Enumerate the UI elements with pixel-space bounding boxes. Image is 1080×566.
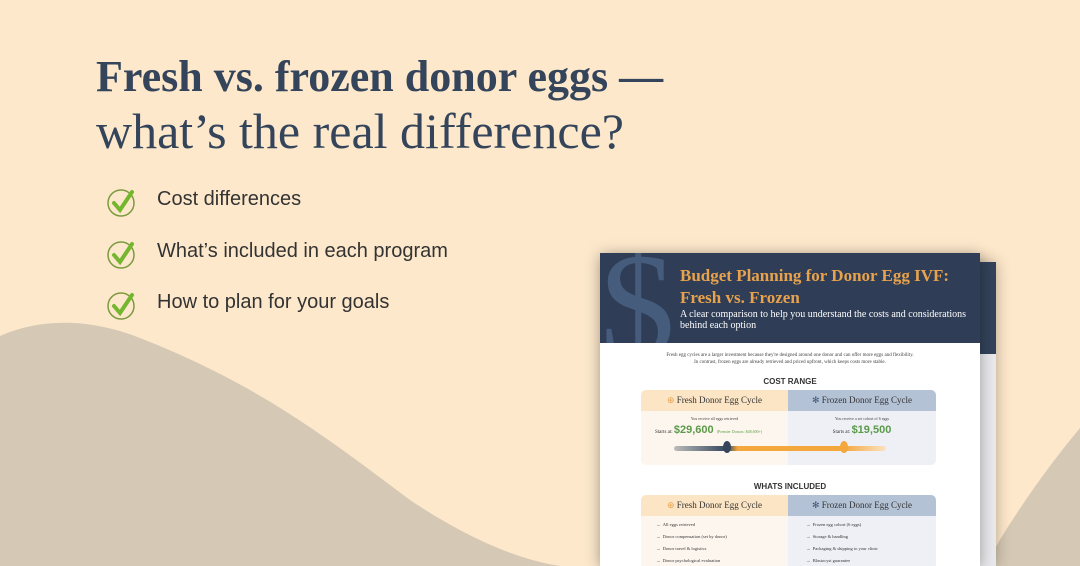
cost range panel: You receive a set cohort of 6 eggs	[835, 416, 889, 421]
cost range heading: COST RANGE	[763, 377, 817, 386]
whats included panel: → Packaging & shipping to your clinic	[806, 546, 878, 551]
item: cost: Cost differences	[157, 188, 301, 210]
cost range panel	[641, 390, 936, 465]
cost range panel: ✻ Frozen Donor Egg Cycle	[812, 395, 912, 405]
whats included heading: WHATS INCLUDED	[754, 482, 826, 491]
whats included panel: → Storage & handling	[806, 534, 848, 539]
item: included: What’s included in each program	[157, 240, 448, 262]
doc header: Budget Planning for Donor Egg IVF:	[680, 266, 949, 285]
item: plan: How to plan for your goals	[157, 291, 389, 313]
whats included panel: → Blastocyst guarantee	[806, 558, 850, 563]
item: cost	[107, 188, 301, 217]
cost range panel: Starts at: $19,500	[833, 424, 891, 436]
title: what’s the real difference?	[96, 103, 624, 159]
doc header: A clear comparison to help you understand the costs and considerations behind each option	[680, 309, 966, 331]
whats included panel: ✻ Frozen Donor Egg Cycle	[812, 500, 912, 510]
whats included panel: → Donor travel & logistics	[656, 546, 706, 551]
back pages	[612, 262, 996, 566]
whats included panel: → Donor psychological evaluation	[656, 558, 720, 563]
doc header: Fresh vs. Frozen	[680, 288, 800, 307]
intro text	[666, 352, 914, 365]
item: included	[107, 240, 448, 269]
checklist	[107, 188, 448, 320]
item: plan	[107, 291, 389, 320]
whats included panel	[641, 495, 936, 566]
cost range panel: ⊕ Fresh Donor Egg Cycle	[667, 395, 762, 405]
cost range panel: Starts at: $29,600 (Premier Donors: $48,600+)	[655, 424, 762, 436]
title	[96, 52, 664, 159]
doc header	[600, 253, 980, 343]
intro text: In contrast, frozen eggs are already retrieved and priced upfront, which keeps costs more stable.	[694, 360, 886, 365]
title: Fresh vs. frozen donor eggs —	[96, 52, 663, 101]
whats included panel: → All eggs retrieved	[656, 522, 695, 527]
document preview	[600, 253, 980, 566]
whats included panel: ⊕ Fresh Donor Egg Cycle	[667, 500, 762, 510]
whats included panel: → Frozen egg cohort (6 eggs)	[806, 522, 861, 527]
intro text: Fresh egg cycles are a larger investment because they're designed around one donor and can offer more eggs and flexibility.	[666, 353, 914, 358]
whats included panel: → Donor compensation (set by donor)	[656, 534, 727, 539]
cost range panel: You receive all eggs retrieved	[691, 416, 738, 421]
